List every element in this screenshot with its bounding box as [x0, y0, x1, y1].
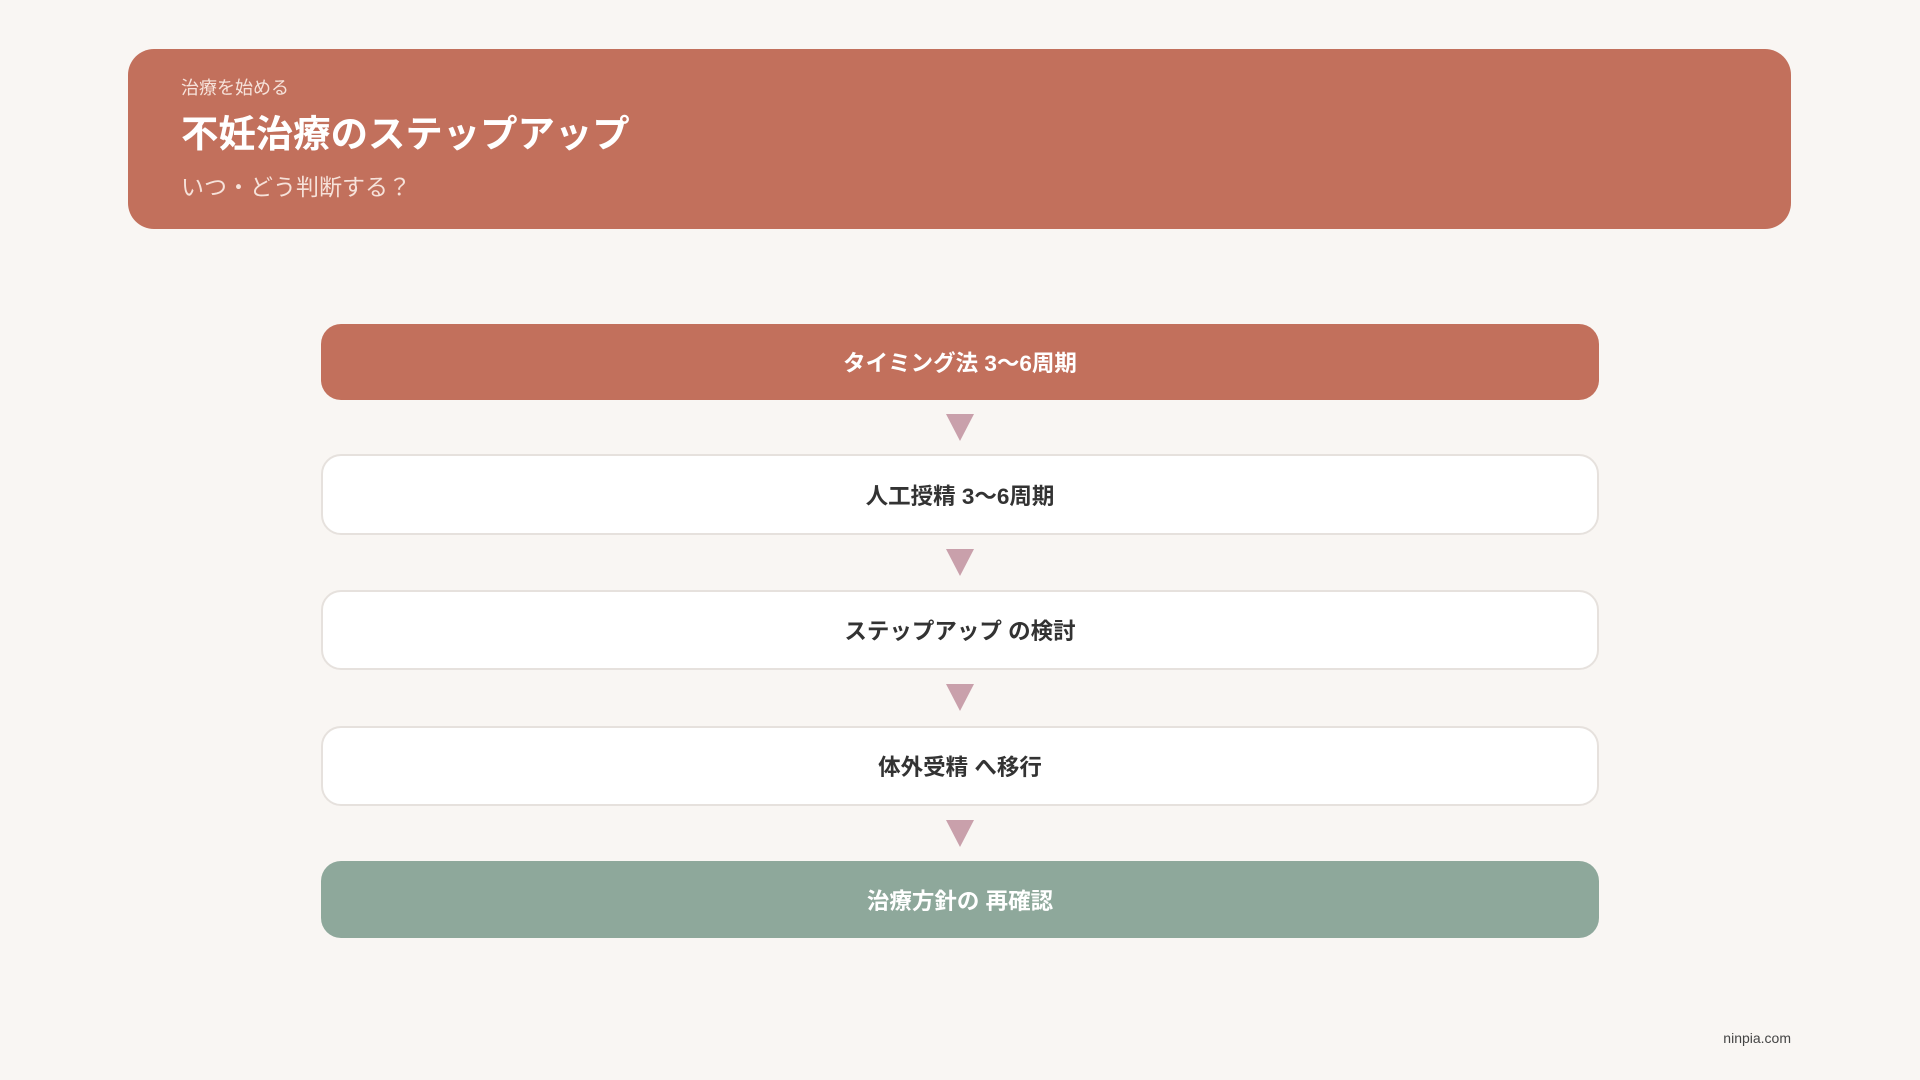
- step 4: IVF: [321, 726, 1599, 806]
- header panel: [128, 49, 1791, 229]
- step 2: artificial insemination: [321, 454, 1599, 535]
- footer source: ninpia.com: [1723, 1030, 1791, 1046]
- step 2: artificial insemination: 人工授精 3〜6周期: [866, 484, 1054, 508]
- step 1: timing: [321, 324, 1599, 400]
- step 5: reconfirm: [321, 861, 1599, 938]
- subtitle: いつ・どう判断する？: [181, 174, 411, 200]
- step 4: IVF: 体外受精 へ移行: [878, 755, 1042, 780]
- step 5: reconfirm: 治療方針の 再確認: [867, 888, 1053, 914]
- step 3: consider step-up: ステップアップ の検討: [844, 619, 1076, 644]
- kicker text: 治療を始める: [181, 78, 289, 98]
- step 1: timing: タイミング法 3〜6周期: [843, 351, 1077, 376]
- arrow 2: [946, 549, 974, 576]
- arrow 1: [946, 414, 974, 441]
- title: 不妊治療のステップアップ: [181, 113, 630, 155]
- arrow 4: [946, 820, 974, 847]
- step 3: consider step-up: [321, 590, 1599, 670]
- arrow 3: [946, 684, 974, 711]
